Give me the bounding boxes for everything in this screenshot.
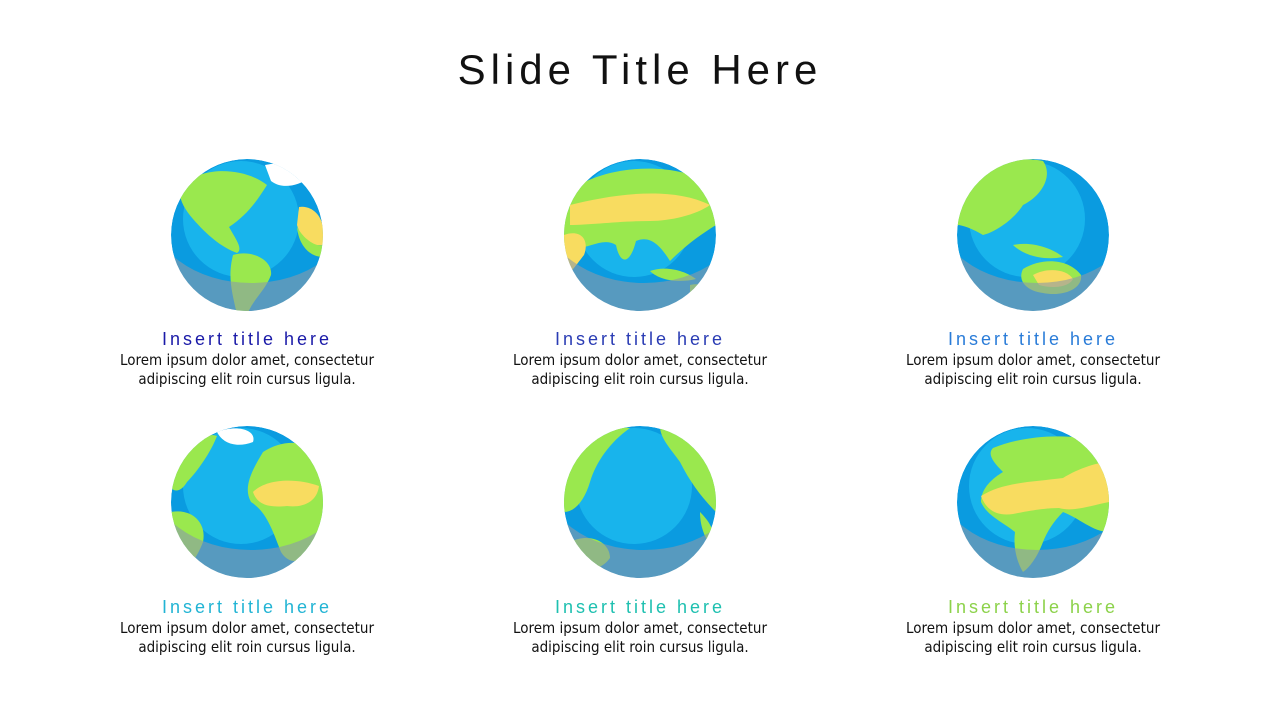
card 4: Lorem ipsum dolor amet, consectetur [120, 619, 374, 637]
card 6: adipiscing elit roin cursus ligula. [924, 638, 1142, 656]
card 5 [513, 597, 768, 656]
card 1: Insert title here [162, 329, 332, 349]
card 2: Insert title here [555, 329, 725, 349]
card 1 [120, 329, 374, 388]
card 4: adipiscing elit roin cursus ligula. [138, 638, 356, 656]
card 2: adipiscing elit roin cursus ligula. [531, 370, 749, 388]
card 6: Insert title here [948, 597, 1118, 617]
card 4: Insert title here [162, 597, 332, 617]
card 1: Lorem ipsum dolor amet, consectetur [120, 351, 374, 369]
icon: globe pacific [560, 422, 720, 582]
icon: globe atlantic [167, 422, 327, 582]
card 2 [513, 329, 768, 388]
card 3: adipiscing elit roin cursus ligula. [924, 370, 1142, 388]
card 5: Lorem ipsum dolor amet, consectetur [513, 619, 767, 637]
title: Slide Title Here [458, 46, 822, 93]
icon: globe oceania [953, 155, 1113, 315]
card 4 [120, 597, 374, 656]
icon: globe asia [560, 155, 720, 315]
icon: globe europe africa [953, 422, 1113, 582]
icon: globe americas [167, 155, 327, 315]
card 3: Lorem ipsum dolor amet, consectetur [906, 351, 1160, 369]
card 6 [906, 597, 1160, 656]
card 3 [906, 329, 1160, 388]
card 5: Insert title here [555, 597, 725, 617]
card 6: Lorem ipsum dolor amet, consectetur [906, 619, 1160, 637]
card 1: adipiscing elit roin cursus ligula. [138, 370, 356, 388]
card 3: Insert title here [948, 329, 1118, 349]
card 5: adipiscing elit roin cursus ligula. [531, 638, 749, 656]
card 2: Lorem ipsum dolor amet, consectetur [513, 351, 767, 369]
